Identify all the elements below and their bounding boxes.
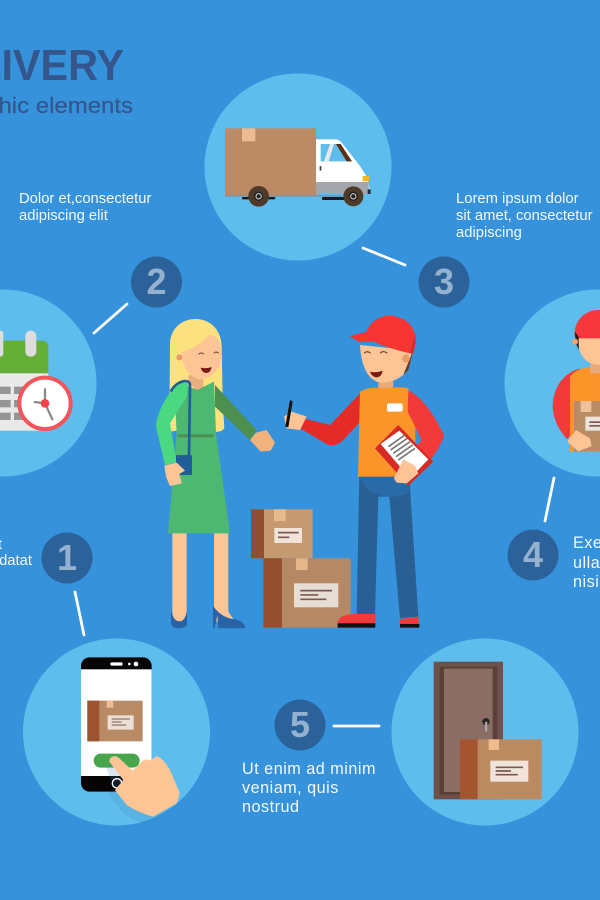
icon: calendar and clock	[0, 331, 71, 431]
icon: door and parcel	[434, 662, 542, 799]
text block: step 5: Ut enim ad minim	[242, 760, 376, 778]
number badge 2	[131, 256, 182, 308]
text block: step 4	[573, 534, 600, 591]
illustration: customer and courier	[156, 316, 444, 628]
panel: step 3 truck	[204, 74, 392, 260]
panel: step 5 door with parcel	[392, 638, 578, 826]
text block: step 3: sit amet, consectetur	[456, 208, 593, 224]
icon: delivery truck	[225, 128, 371, 207]
panel: step 4 courier with box	[504, 290, 600, 476]
text block: step 3	[456, 191, 593, 241]
number badge 5: 5	[290, 704, 310, 745]
number badge 4	[508, 530, 558, 580]
parcel stack	[251, 509, 351, 628]
number badge 5	[274, 700, 326, 750]
number badge 2: 2	[146, 261, 167, 302]
woman customer	[156, 319, 275, 628]
text block: step 4: nisi	[573, 573, 599, 591]
text block: step 1	[0, 537, 32, 569]
courier	[284, 316, 444, 628]
title	[0, 41, 133, 118]
text block: step 2: adipiscing elit	[19, 208, 108, 224]
text block: step 2	[19, 191, 151, 224]
icon: courier	[553, 310, 600, 452]
panel: step 1 phone order	[23, 638, 210, 827]
text block: step 2: Dolor et,consectetur	[19, 191, 151, 207]
clipboard	[375, 425, 433, 486]
icon: smartphone with hand	[81, 657, 180, 827]
text block: step 5: nostrud	[242, 798, 300, 816]
number badge 4: 4	[523, 534, 543, 575]
panel: step 2 calendar	[0, 290, 96, 476]
text block: step 5	[242, 760, 376, 816]
connector lines	[75, 248, 554, 726]
number badge 3	[418, 256, 470, 308]
text block: step 3: Lorem ipsum dolor	[456, 191, 579, 207]
number badge 3: 3	[434, 261, 454, 302]
text block: step 5: veniam, quis	[242, 779, 339, 797]
number badge 1: 1	[57, 537, 77, 578]
text block: step 3: adipiscing	[456, 225, 522, 241]
number badge 1	[42, 532, 92, 584]
